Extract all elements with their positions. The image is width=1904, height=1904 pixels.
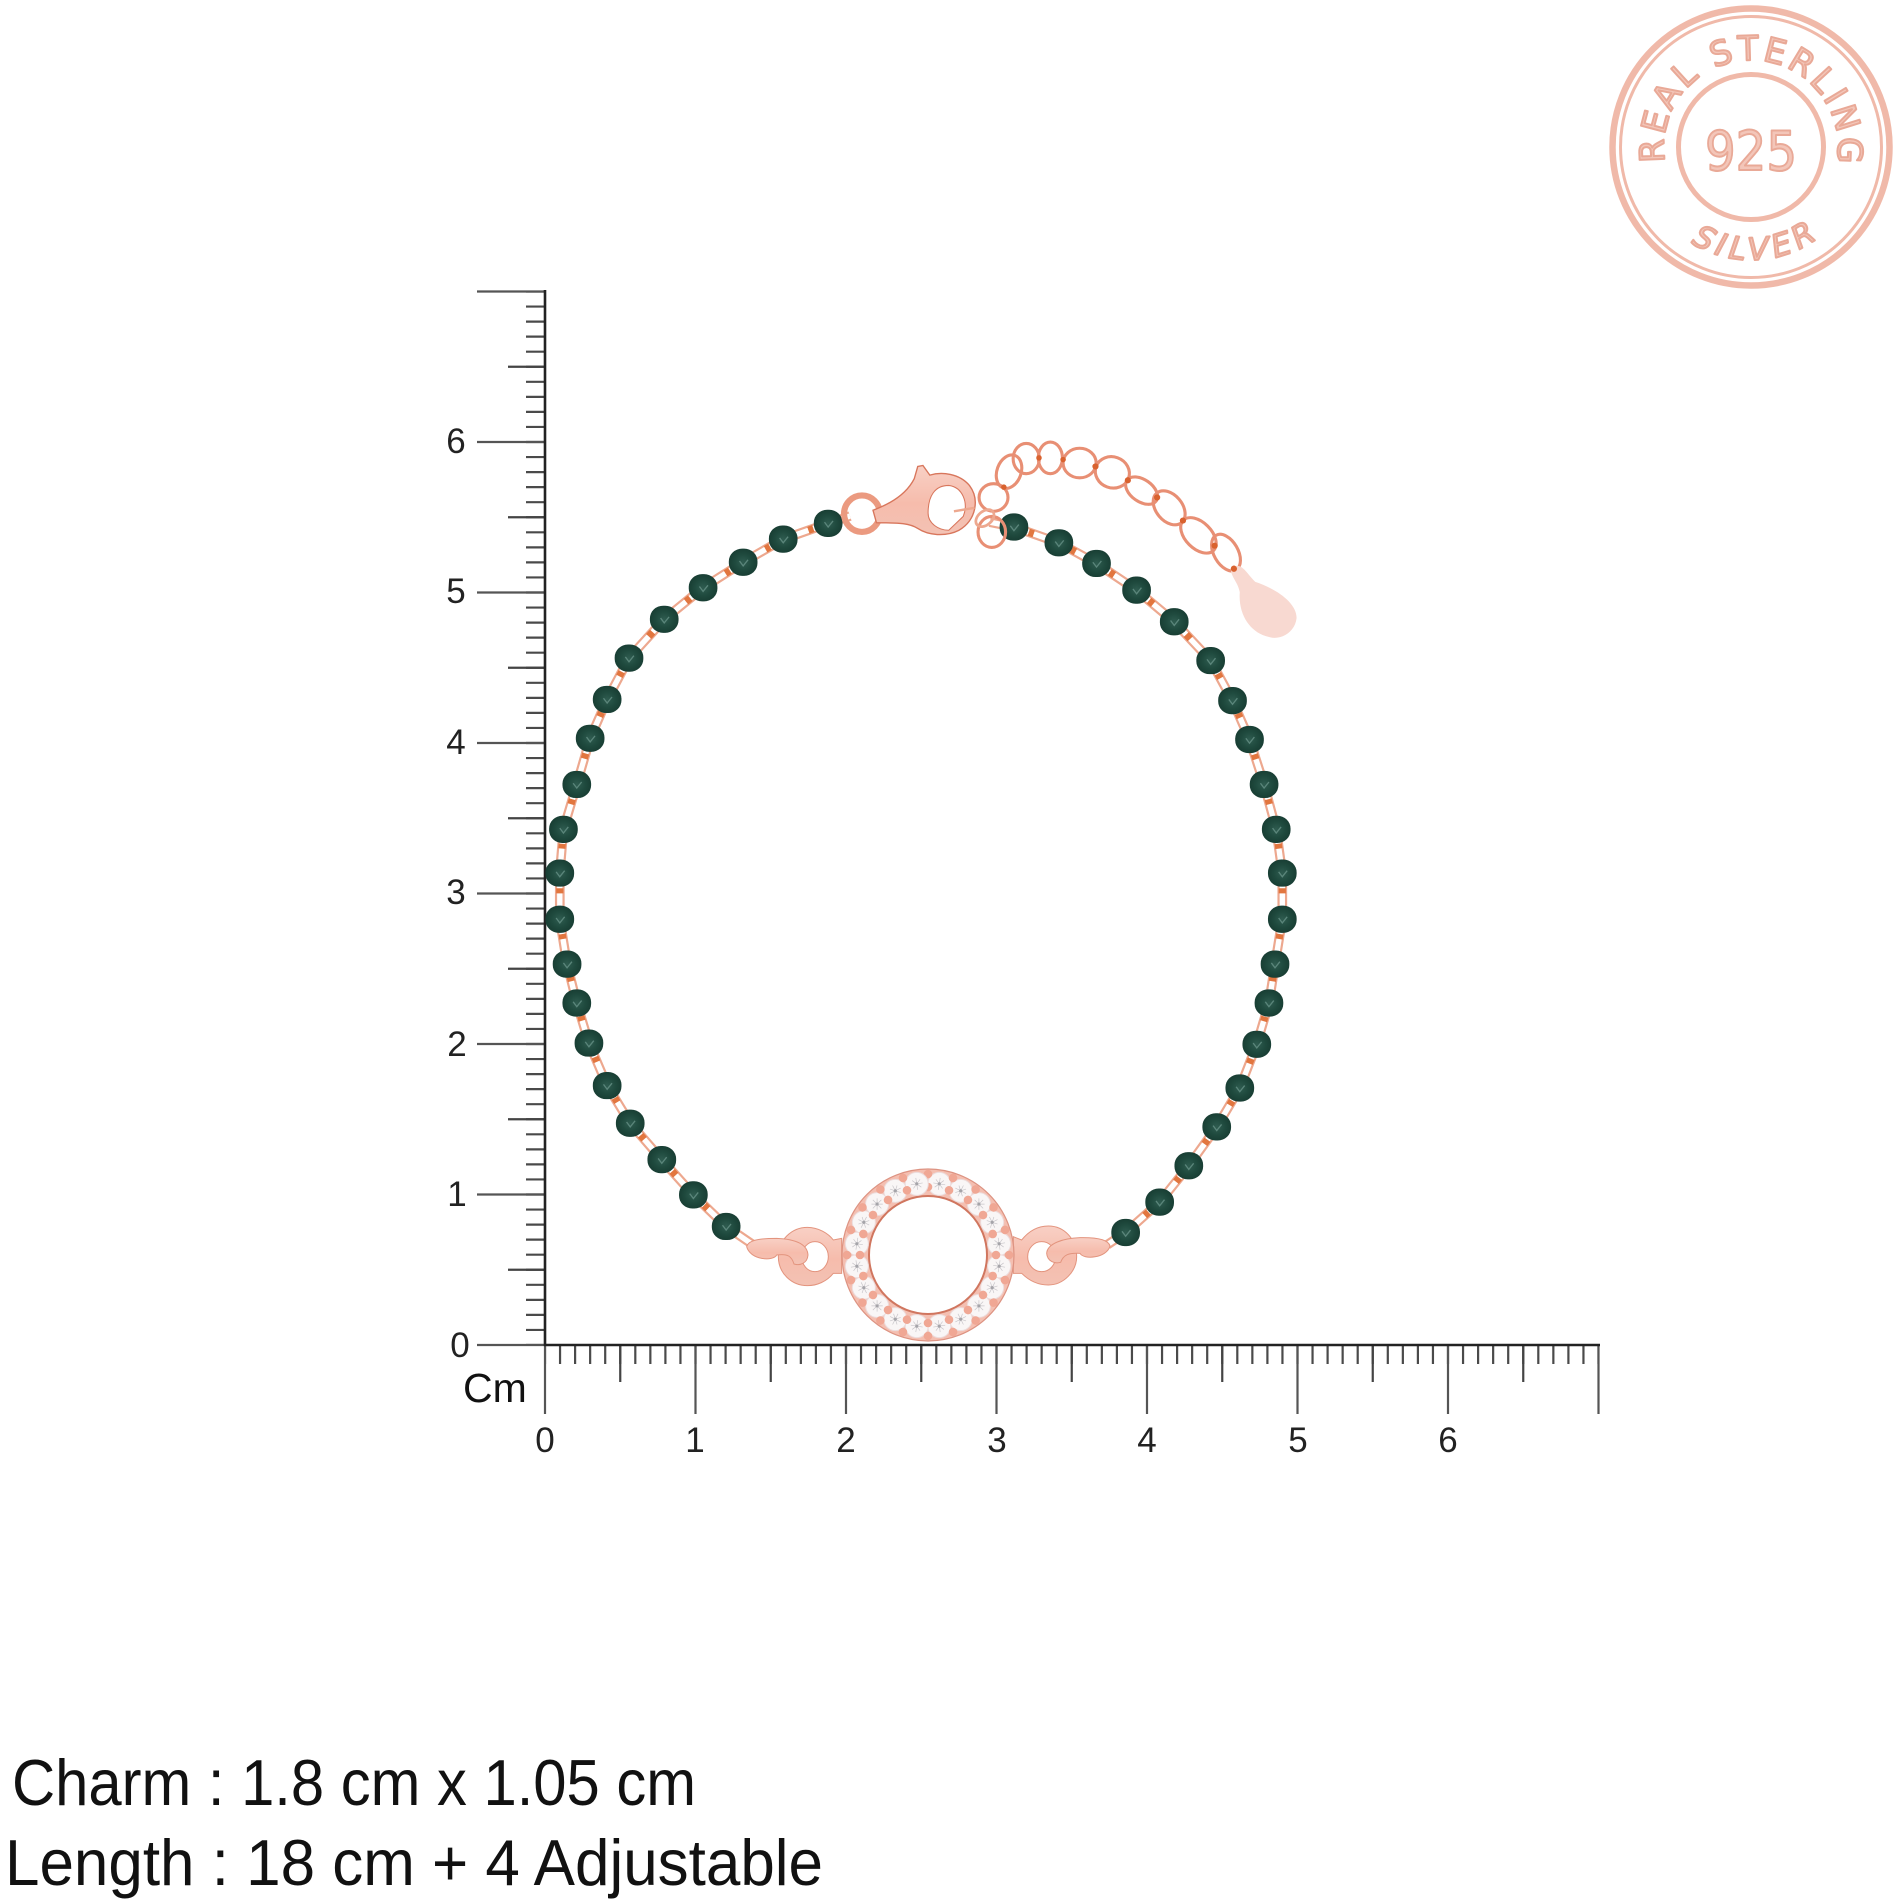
stamp centre number: 925: [1705, 120, 1797, 183]
ruler: vertical scale: [446, 290, 545, 1365]
horizontal scale numbers: 6: [1438, 1421, 1458, 1460]
length dimension text: Length : 18 cm + 4 Adjustable: [5, 1826, 823, 1899]
stamp top text: REAL STERLING: [1638, 34, 1864, 162]
horizontal scale numbers: 2: [836, 1421, 856, 1460]
vertical scale numbers: 1: [447, 1175, 467, 1214]
vertical scale numbers: 3: [446, 873, 466, 912]
horizontal scale numbers: 5: [1288, 1421, 1308, 1460]
vertical scale numbers: 6: [446, 422, 466, 461]
bracelet: [545, 442, 1297, 1344]
extension chain with tag: [978, 442, 1297, 638]
stamp: real sterling 925 silver: [1609, 5, 1893, 289]
horizontal scale numbers: 4: [1137, 1421, 1157, 1460]
vertical scale numbers: 0: [450, 1326, 470, 1365]
vertical scale numbers: 2: [447, 1025, 467, 1064]
jump ring and lobster clasp: [844, 465, 997, 535]
left connector rings: [747, 1227, 842, 1286]
horizontal scale numbers: 1: [685, 1421, 705, 1460]
charm dimension text: Charm : 1.8 cm x 1.05 cm: [12, 1746, 696, 1819]
right connector rings: [1013, 1226, 1110, 1285]
horizontal scale numbers: [535, 1421, 1458, 1460]
bead chain: [545, 510, 1297, 1246]
vertical scale numbers: 5: [446, 572, 466, 611]
horizontal scale numbers: 3: [987, 1421, 1007, 1460]
stamp bottom text: SILVER: [1690, 222, 1816, 261]
vertical scale numbers: 4: [446, 723, 466, 762]
tag: [1231, 566, 1297, 638]
vertical scale numbers: [446, 422, 470, 1365]
ruler: horizontal scale: [535, 1345, 1600, 1460]
unit label: Cm: [463, 1365, 527, 1411]
charm: pave circle: [839, 1166, 1017, 1344]
horizontal scale numbers: 0: [535, 1421, 555, 1460]
